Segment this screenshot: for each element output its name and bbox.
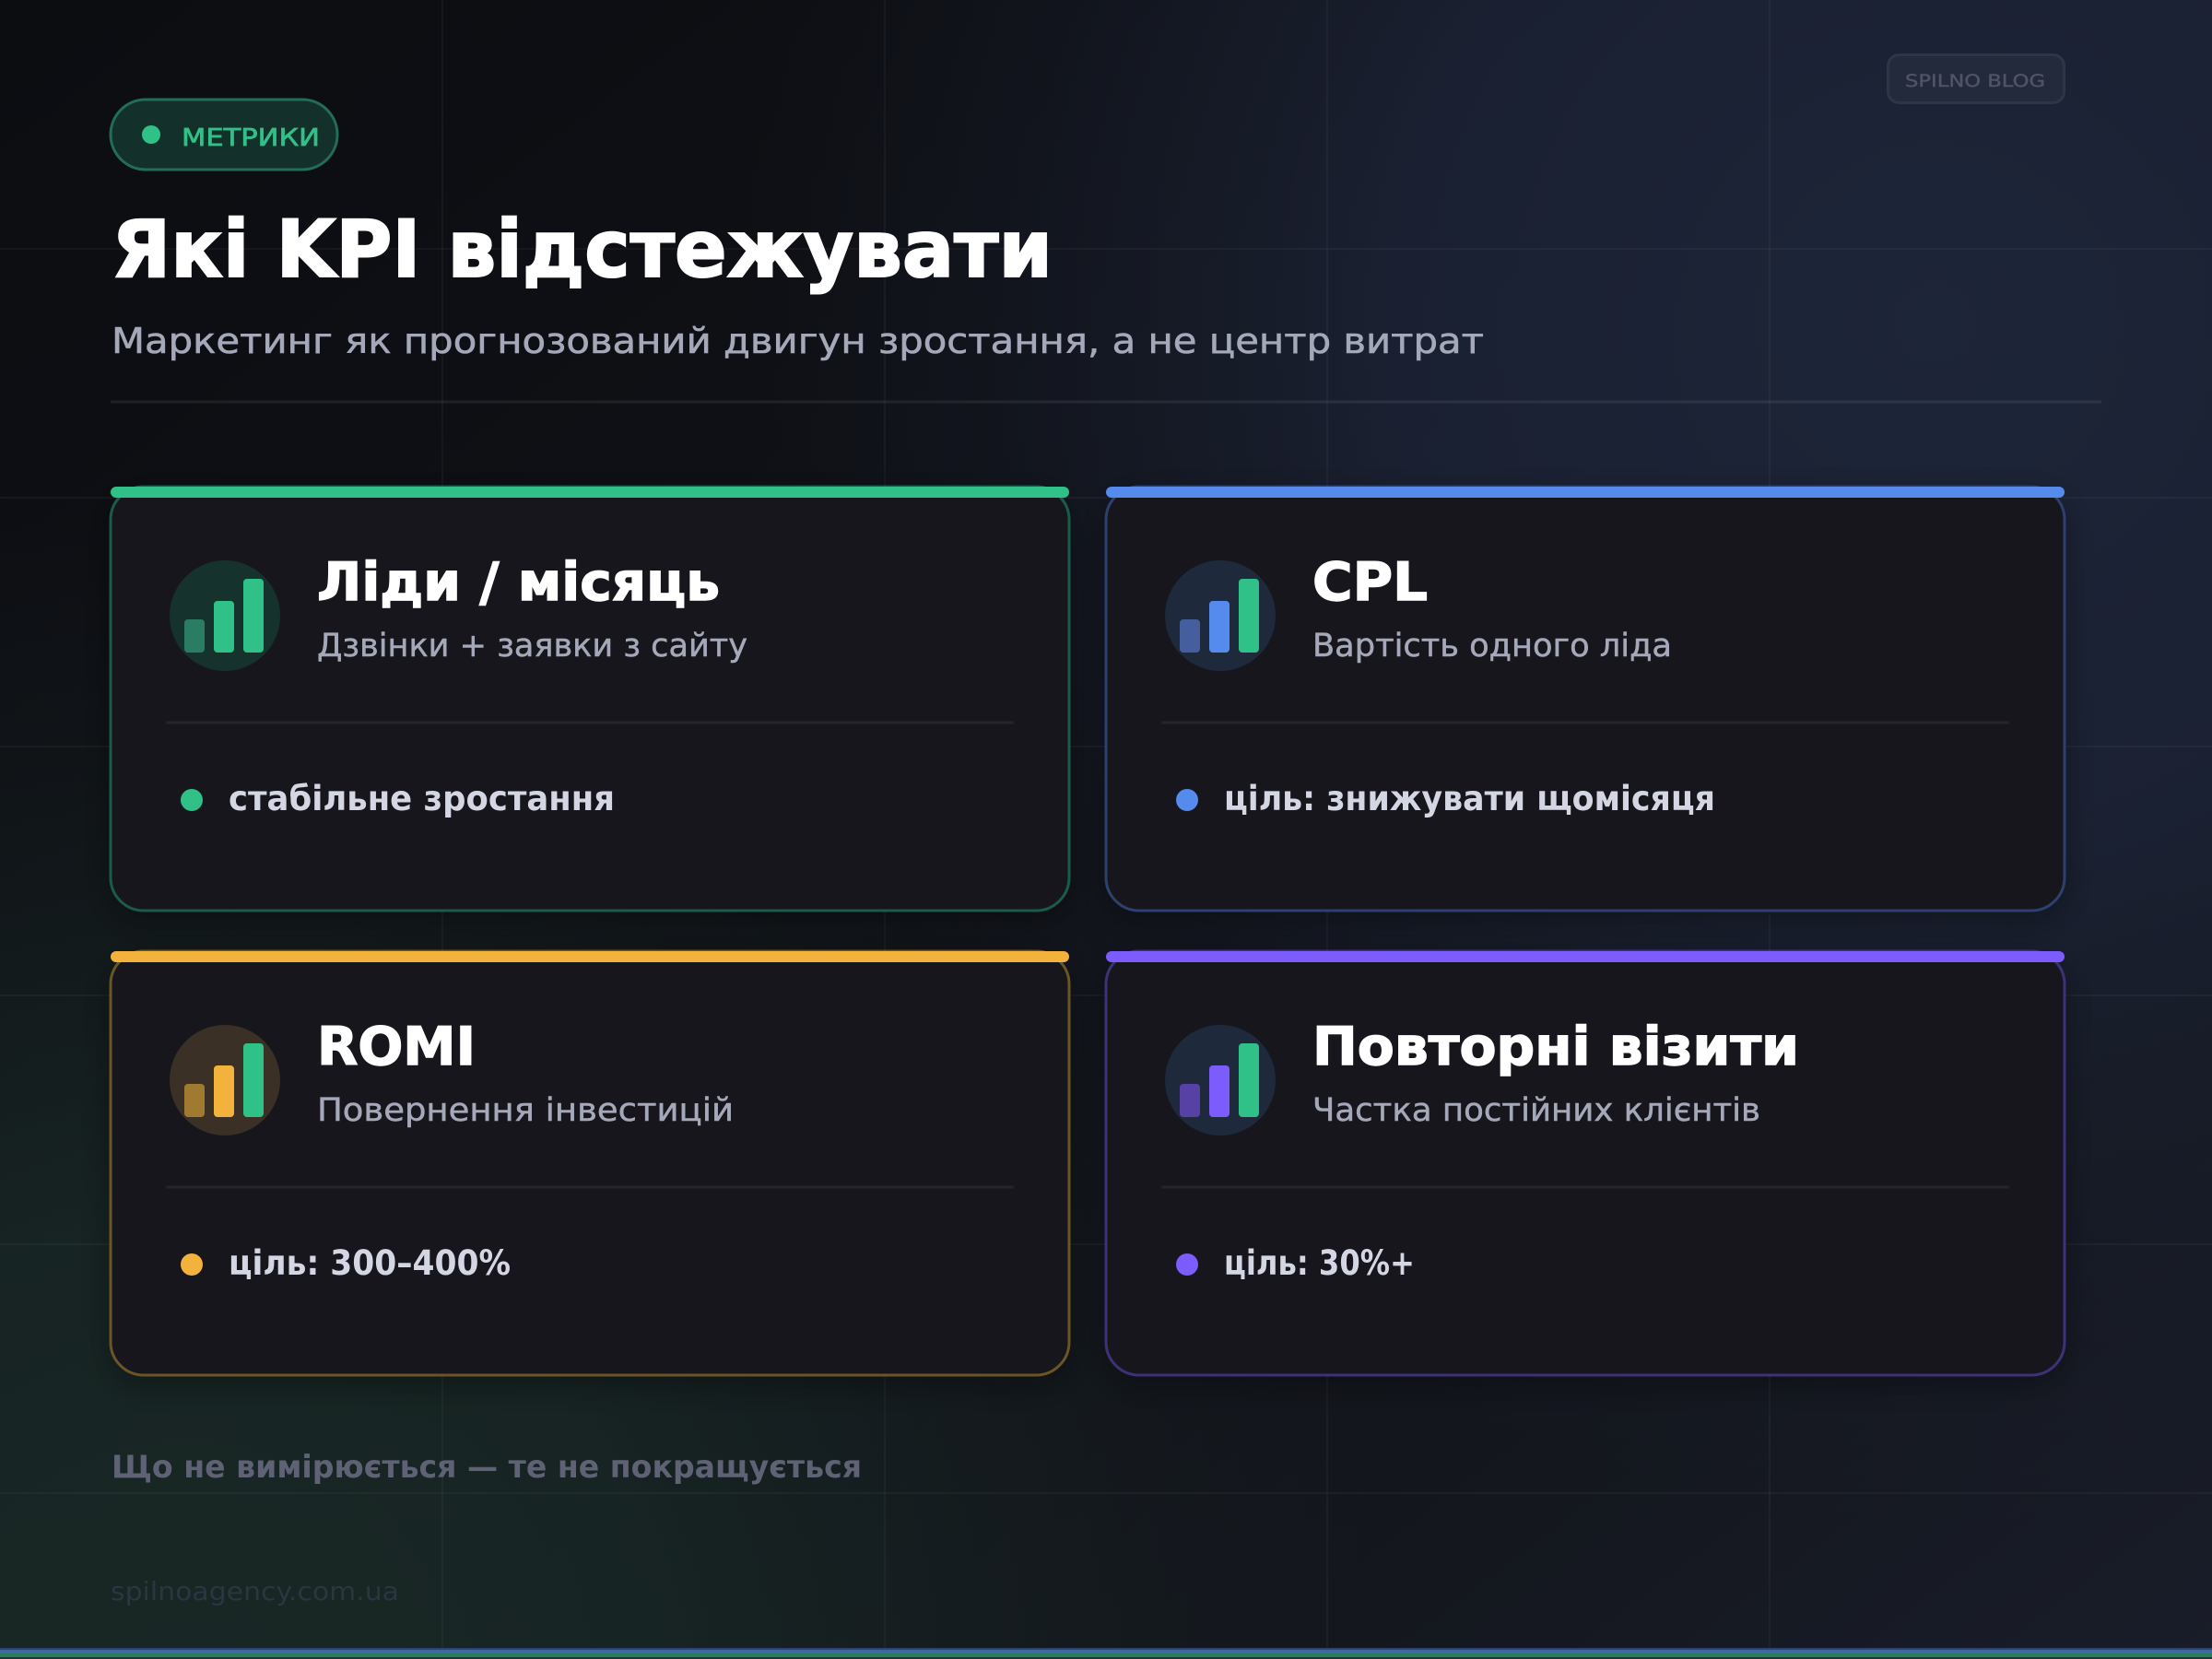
card heading: Ліди / місяць — [317, 552, 720, 613]
icon: bar chart — [1165, 560, 1276, 671]
card description: Повернення інвестицій — [317, 1092, 734, 1129]
subtitle: Маркетинг як прогнозований двигун зростання, а не центр витрат — [112, 321, 1484, 361]
icon: bar chart — [1165, 1025, 1276, 1135]
brand tag: SPILNO BLOG — [1905, 71, 2045, 91]
status dot — [1176, 789, 1198, 811]
icon: bar chart — [170, 1025, 280, 1135]
status dot — [1176, 1253, 1198, 1276]
target text: ціль: 300–400% — [229, 1243, 511, 1283]
card heading: ROMI — [317, 1017, 476, 1077]
card heading: CPL — [1312, 552, 1428, 613]
icon: bar chart — [170, 560, 280, 671]
card description: Дзвінки + заявки з сайту — [317, 628, 747, 665]
target text: стабільне зростання — [229, 779, 615, 818]
card description: Частка постійних клієнтів — [1312, 1092, 1760, 1129]
target text: ціль: знижувати щомісяця — [1224, 779, 1715, 818]
status dot — [181, 789, 203, 811]
panel: CPL — [1106, 487, 2065, 911]
title: Які KPI відстежувати — [112, 204, 1053, 296]
category badge — [111, 100, 337, 170]
card description: Вартість одного ліда — [1312, 628, 1672, 665]
closing statement: Що не вимірюється — те не покращується — [112, 1449, 862, 1486]
target text: ціль: 30%+ — [1224, 1243, 1415, 1283]
panel: Повторні візити — [1106, 951, 2065, 1375]
panel: ROMI — [111, 951, 1069, 1375]
website: spilnoagency.com.ua — [111, 1576, 399, 1606]
brand tag — [1888, 55, 2065, 103]
card heading: Повторні візити — [1312, 1017, 1799, 1077]
status dot — [181, 1253, 203, 1276]
category badge: МЕТРИКИ — [182, 124, 320, 152]
panel: Ліди / місяць — [111, 487, 1069, 911]
bottom accent bar — [0, 1648, 2212, 1659]
